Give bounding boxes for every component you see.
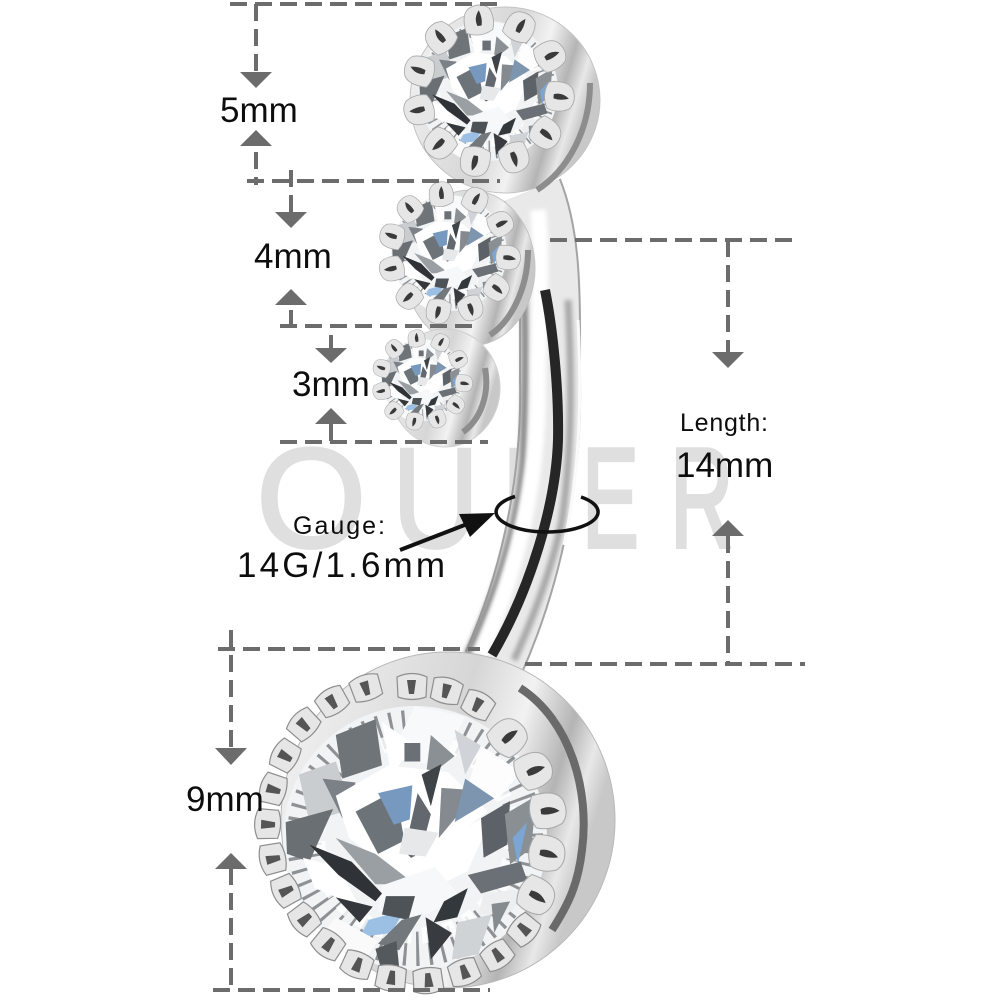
dimension lines: 4mm	[275, 170, 475, 332]
label: 3mm: 3mm	[292, 365, 370, 404]
label: Length: Length:	[680, 409, 768, 437]
label: 14mm: 14mm	[676, 446, 773, 485]
watermark: OUFER: E	[582, 418, 639, 577]
label: 14G/1.6mm: 14G/1.6mm	[237, 546, 445, 585]
watermark: OUFER	[256, 418, 734, 578]
label: 4mm: 4mm	[254, 237, 332, 276]
gauge arrow	[400, 513, 495, 550]
watermark: OUFER: U	[392, 419, 479, 577]
dimension lines: 5mm	[230, 4, 505, 185]
dimension lines: 9mm	[213, 630, 490, 990]
dimension lines: length 14mm	[525, 240, 805, 665]
label: 9mm: 9mm	[186, 780, 264, 819]
large gem: 9mm	[254, 652, 615, 995]
small gem: 3mm	[371, 329, 500, 447]
watermark: OUFER: R	[670, 420, 734, 578]
curved bar	[467, 190, 580, 664]
watermark: OUFER: O	[256, 419, 366, 578]
dimension lines: 3mm	[280, 335, 488, 444]
label: 5mm: 5mm	[220, 91, 298, 130]
gauge ring	[496, 496, 598, 532]
label: Gauge: Gauge:	[293, 512, 385, 540]
top gem: 5mm	[401, 3, 600, 193]
middle gem: 4mm	[377, 180, 535, 346]
watermark: OUFER: F	[503, 420, 558, 578]
